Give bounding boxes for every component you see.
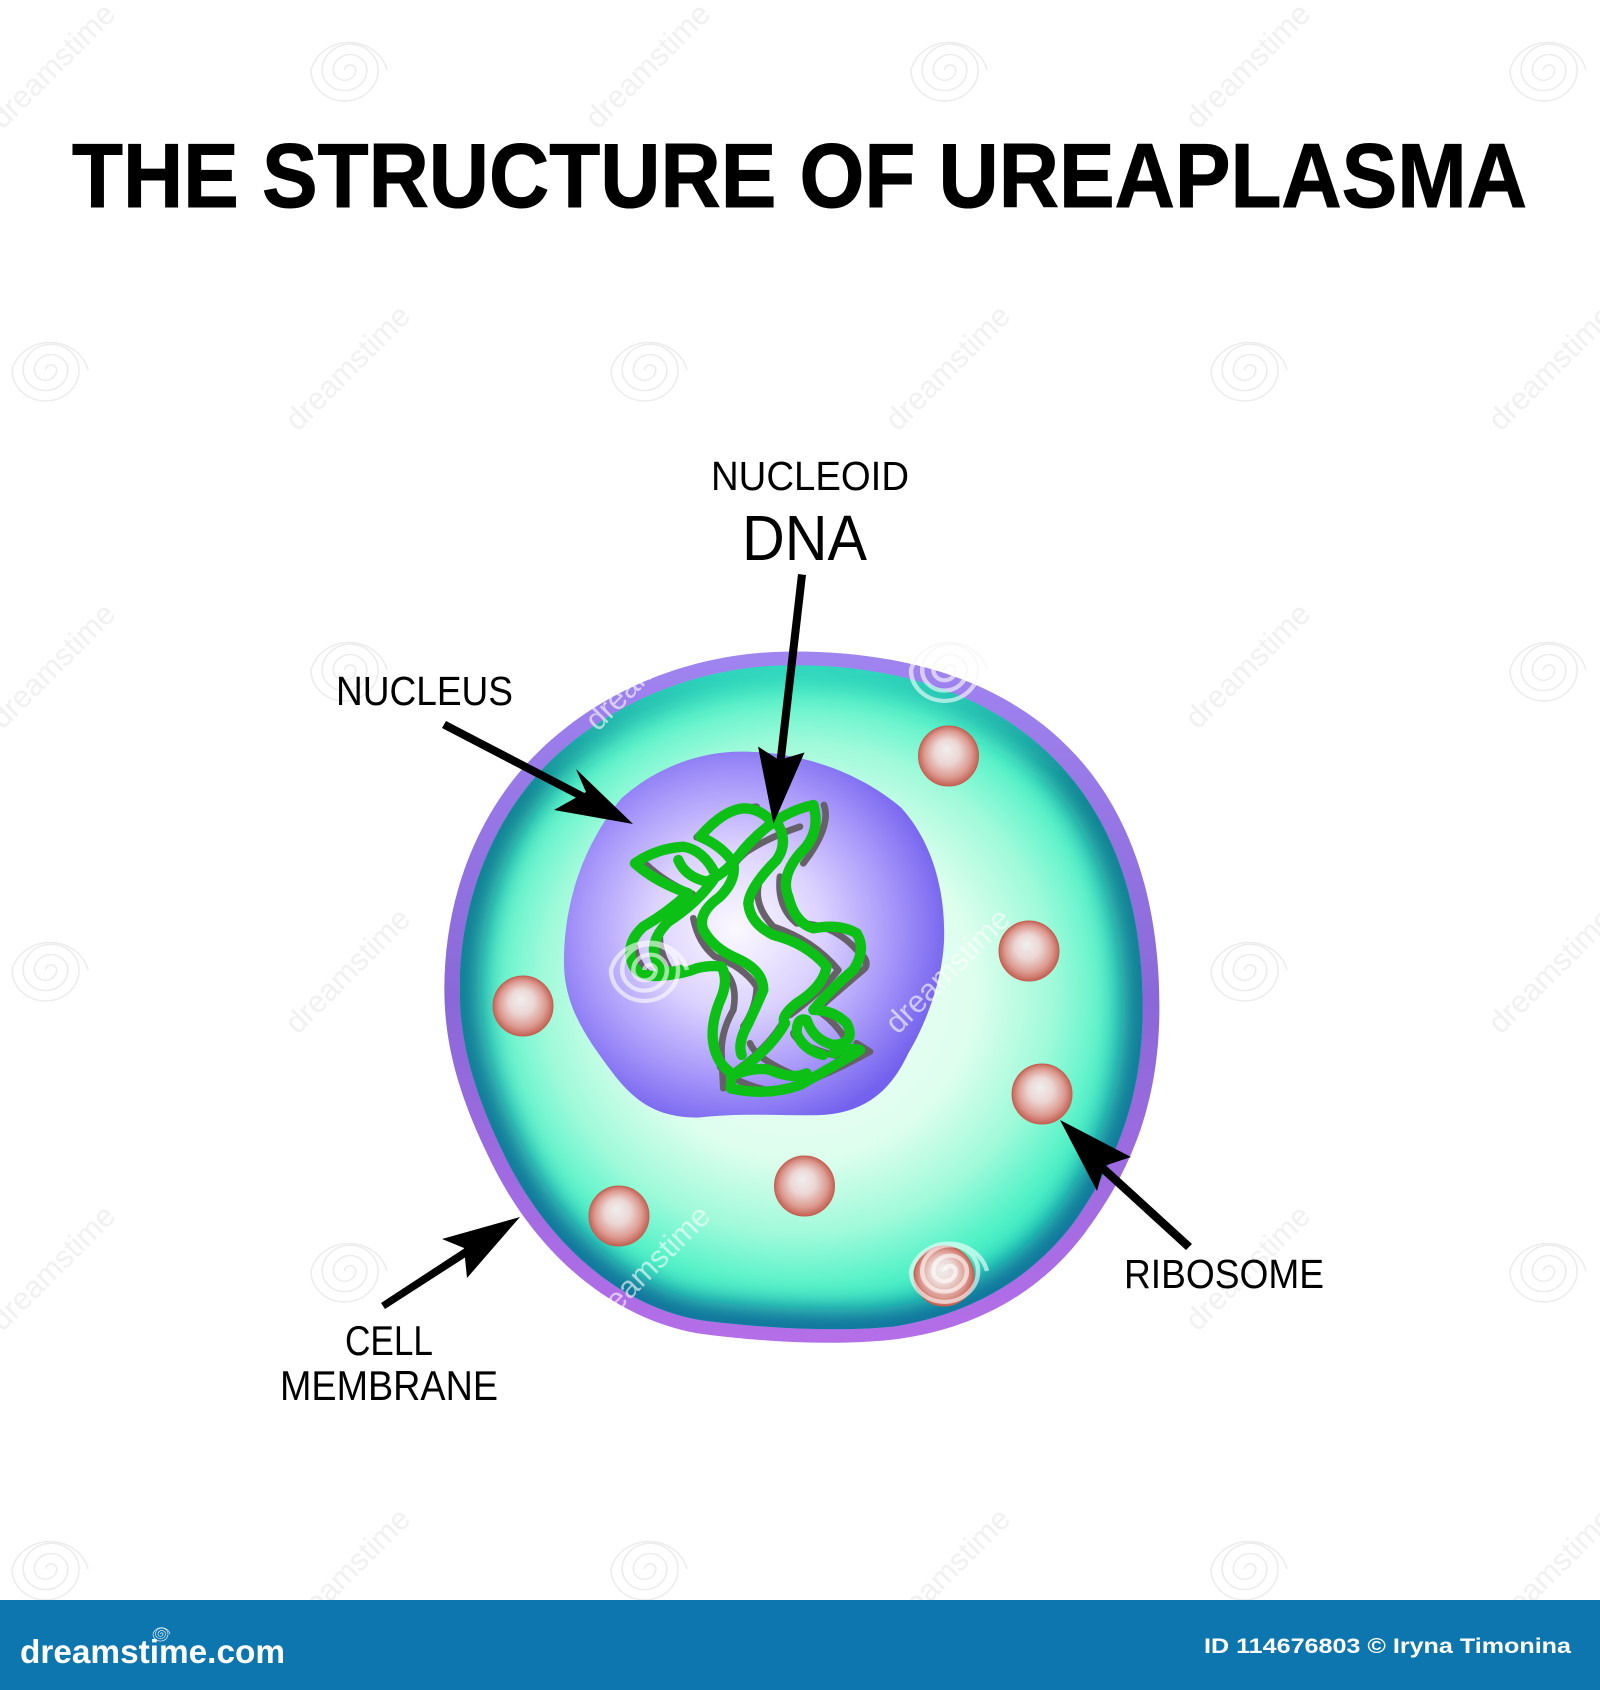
watermark pattern: dreamstime xyxy=(878,298,1017,437)
arrow: nucleus xyxy=(442,721,633,824)
watermark pattern: dreamstime xyxy=(1178,0,1317,135)
gray strand xyxy=(635,805,870,1092)
watermark pattern: dreamstime xyxy=(578,0,717,135)
arrow: ribosome xyxy=(1060,1120,1192,1250)
watermark pattern: dreamstime xyxy=(278,901,417,1040)
label: ribosome: RIBOSOME xyxy=(1124,1251,1324,1297)
arrow: cell membrane xyxy=(381,1217,520,1309)
watermark pattern: dreamstime xyxy=(278,298,417,437)
watermark pattern: dreamstime xyxy=(278,1501,417,1640)
watermark pattern: dreamstime xyxy=(1178,1198,1317,1337)
icon: spiral mark xyxy=(153,1628,170,1641)
cell diagram xyxy=(444,652,1160,1343)
image credit: ID 114676803 © Iryna Timonina xyxy=(1204,1635,1571,1658)
cytoplasm xyxy=(460,665,1143,1330)
footer bar xyxy=(0,1600,1600,1690)
arrow: DNA xyxy=(758,574,806,824)
watermark pattern: dreamstime xyxy=(878,1501,1017,1640)
nucleoid DNA strands xyxy=(630,805,870,1092)
cell membrane xyxy=(444,651,1159,1343)
green strand xyxy=(630,805,861,1092)
logo: dreamstime: dreamstime.com xyxy=(20,1633,285,1670)
watermark over cell: dreamstime xyxy=(578,1198,717,1337)
nucleus xyxy=(564,752,944,1118)
ribosomes xyxy=(493,726,1072,1306)
label: cell membrane xyxy=(280,1317,498,1409)
label: cell membrane: MEMBRANE xyxy=(280,1362,498,1409)
watermark pattern: dreamstime xyxy=(1178,596,1317,735)
watermark over cell: dreamstime xyxy=(878,901,1017,1040)
watermark over cell xyxy=(578,598,1017,1337)
label: nucleus: NUCLEUS xyxy=(336,668,513,714)
watermark over cell: dreamstime xyxy=(578,598,717,737)
label: cell membrane: CELL xyxy=(345,1317,433,1364)
label: DNA: DNA xyxy=(742,502,867,574)
label: nucleoid: NUCLEOID xyxy=(711,453,909,499)
